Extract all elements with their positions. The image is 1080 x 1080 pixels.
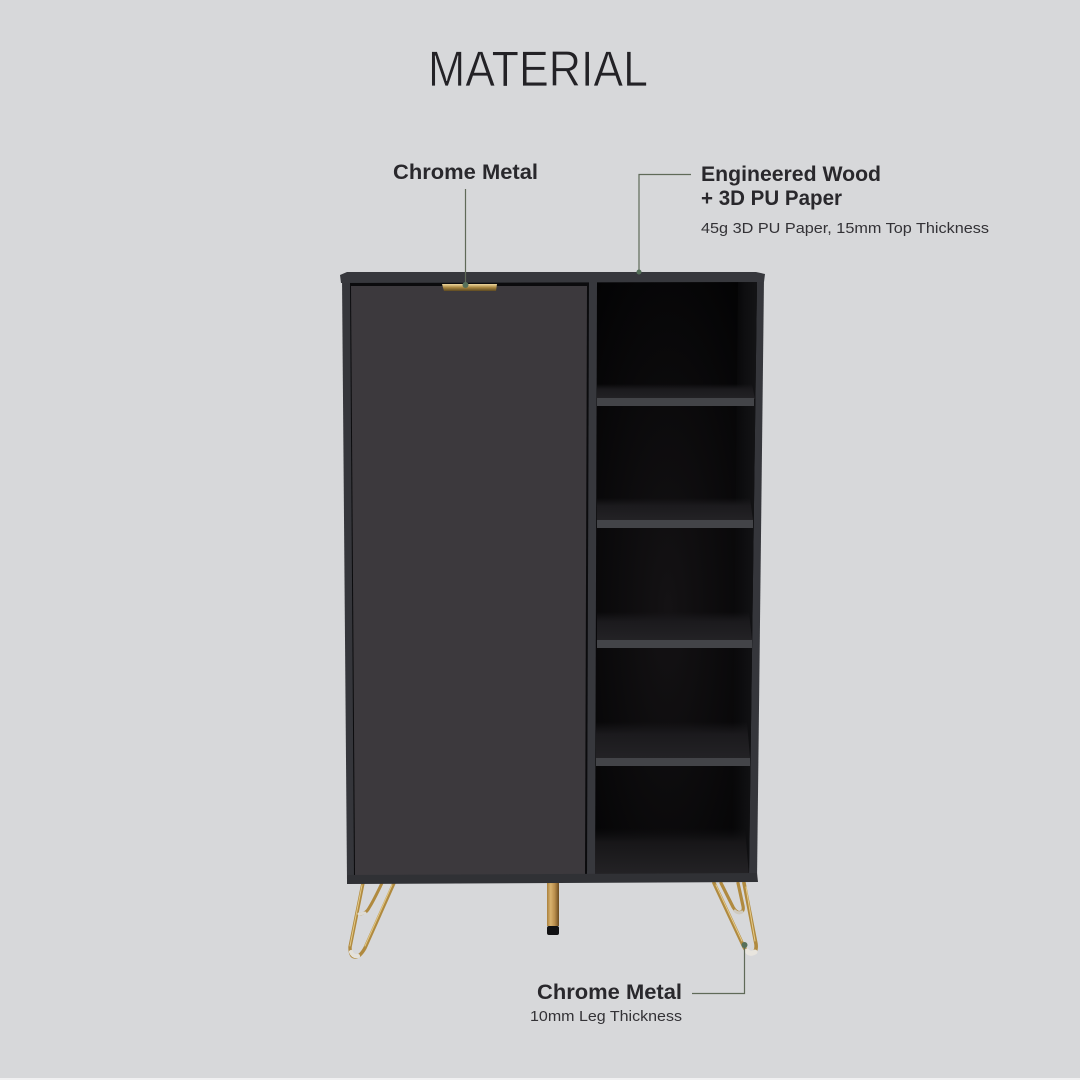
shelf surfaces bbox=[595, 384, 755, 876]
leader dot bbox=[636, 270, 642, 274]
leader line bbox=[464, 189, 466, 285]
detail text: 45g 3D PU Paper, 15mm Top Thickness bbox=[701, 220, 989, 237]
leader line bbox=[692, 945, 744, 994]
centre divider bbox=[587, 282, 597, 876]
leader dot bbox=[462, 282, 468, 288]
shelf fronts bbox=[596, 398, 754, 766]
left hairpin leg bbox=[350, 883, 394, 957]
door shadow edge bbox=[350, 282, 589, 877]
detail text: 10mm Leg Thickness bbox=[530, 1008, 682, 1025]
interior right wall bbox=[732, 282, 757, 876]
title: MATERIAL bbox=[428, 41, 648, 97]
leader dot bbox=[742, 942, 748, 948]
heading line one: Engineered Wood bbox=[701, 163, 881, 186]
base panel bbox=[347, 873, 758, 884]
brass handle bbox=[442, 284, 497, 291]
label: chrome metal: Chrome Metal bbox=[537, 981, 682, 1004]
leader line bbox=[639, 174, 691, 272]
door panel bbox=[351, 286, 587, 875]
label: chrome metal: Chrome Metal bbox=[393, 161, 538, 184]
callout: chrome metal handle bbox=[393, 161, 538, 288]
cabinet with legs bbox=[340, 272, 765, 957]
callout: engineered wood bbox=[636, 163, 989, 274]
top panel bbox=[340, 272, 765, 283]
heading line two: + 3D PU Paper bbox=[701, 187, 842, 210]
open compartment interior bbox=[595, 282, 757, 876]
right hairpin leg bbox=[714, 883, 756, 953]
centre rear leg bbox=[547, 882, 559, 935]
callout: chrome metal legs bbox=[530, 942, 748, 1025]
cabinet carcass bbox=[342, 278, 764, 880]
